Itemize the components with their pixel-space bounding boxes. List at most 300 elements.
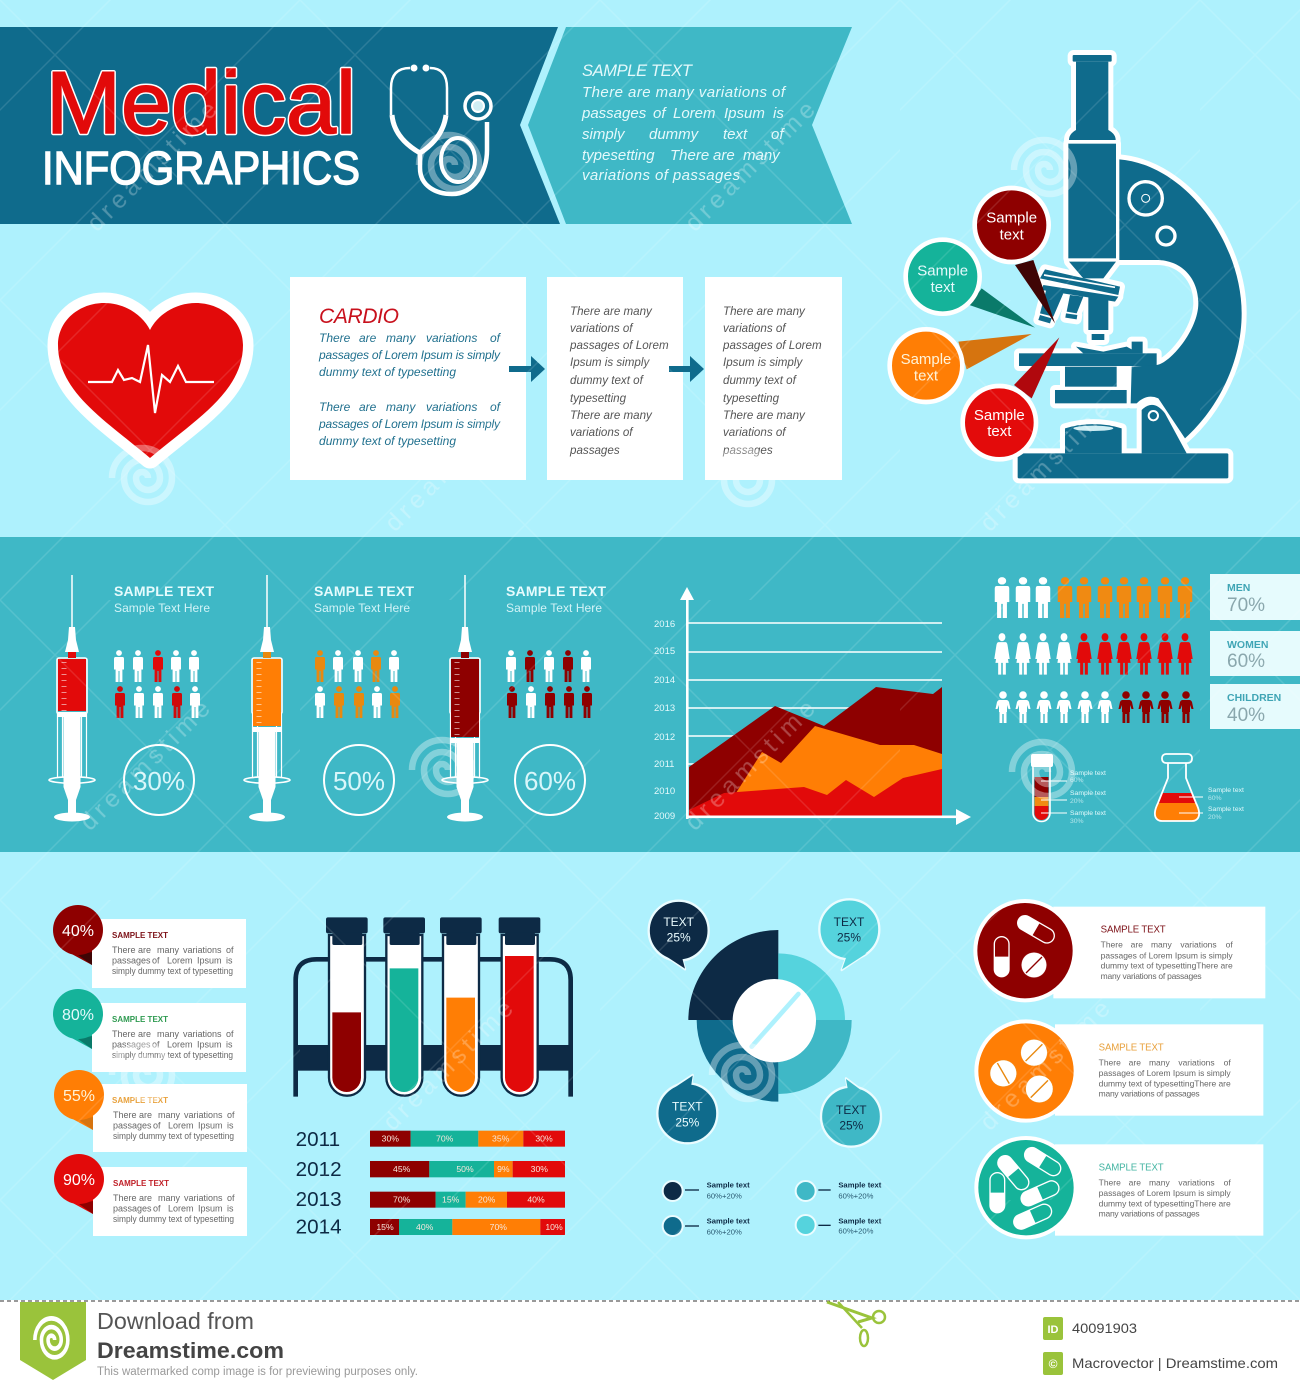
callout: dark red sample text: Sample: [986, 210, 1037, 227]
list item: 55%: [54, 1070, 247, 1152]
text block: cardio body: [318, 331, 502, 448]
list item: 90%: Ipsum: [198, 1204, 223, 1214]
list item: 90%: variations: [184, 1193, 223, 1203]
area chart: [654, 587, 971, 825]
list item: 40%: passages: [112, 956, 151, 966]
list item: 40%: are: [138, 945, 151, 955]
callout: teal sample text: [906, 240, 1035, 328]
heading and text: [1099, 1042, 1231, 1099]
chart year labels: 2015: [654, 646, 675, 657]
callout: navy 25%: TEXT: [663, 915, 695, 929]
icon: dark red syringe: [442, 575, 488, 822]
text block: cardio body: There: [319, 331, 351, 345]
panel: second text box: variations of: [570, 426, 634, 439]
icon: heart with ECG: [58, 303, 243, 458]
chart area: dark red series: [689, 687, 942, 816]
chart area: orange series: [736, 726, 942, 816]
arrow: second to third box: [669, 356, 704, 382]
legend: navy: 60%+20%: [707, 1191, 742, 1200]
panel: second text box: dummy text of: [570, 374, 645, 387]
panel: third text box: passages of Lorem: [722, 339, 822, 352]
list item: 40%: There: [112, 945, 136, 955]
bar row: 2013: 2013: [296, 1188, 342, 1211]
callout: teal sample text: Sample: [917, 263, 968, 280]
heading and text: There: [1099, 1178, 1121, 1188]
banner text block: [581, 62, 787, 184]
list item: 55%: passages: [113, 1120, 152, 1130]
list item: 80%: variations: [183, 1029, 222, 1039]
title: Infographics: INFOGRAPHICS: [42, 142, 360, 194]
list item: 40%: SAMPLE TEXT: [112, 931, 168, 940]
heading: sample text: Sample Text Here: [114, 601, 210, 615]
icon: orange pill circle: [976, 1021, 1076, 1121]
heading and text: dummy text of typesettingThere are: [1101, 961, 1233, 971]
footer strip: [0, 1300, 1300, 1390]
list item: 55%: Lorem: [168, 1120, 194, 1130]
text block: cardio body: of: [490, 400, 502, 414]
list item: 55%: SAMPLE TEXT: [112, 1096, 168, 1105]
callout: dark red sample text: [975, 188, 1055, 323]
list item: 90%: are: [139, 1193, 152, 1203]
icon: test tube with labels: Sample text: [1070, 810, 1106, 817]
icon: dark red pill circle: [975, 901, 1075, 1000]
panel: third text box: variations of: [723, 426, 787, 439]
legend: teal: 60%+20%: [838, 1191, 874, 1200]
text block: cardio body: There: [319, 400, 351, 414]
callout: teal sample text: text: [931, 279, 956, 296]
legend: dark teal: Sample text: [707, 1217, 750, 1226]
list item: 40%: Lorem: [167, 956, 193, 966]
heading: cardio: CARDIO: [319, 305, 399, 328]
banner text block: simply: [582, 126, 626, 143]
panel: second text box: variations of: [570, 322, 634, 335]
people pictogram: [315, 650, 400, 718]
percent circle: 30%: [124, 745, 194, 815]
heading and text: many variations of passages: [1099, 1089, 1200, 1099]
icon: flask with labels: Sample text: [1208, 806, 1244, 813]
list item: 55%: Ipsum: [198, 1120, 223, 1130]
banner text block: SAMPLE TEXT: [582, 62, 694, 80]
bar row: 2014: 10%: [545, 1222, 563, 1232]
icon: flask with labels: 60%: [1208, 795, 1222, 802]
men pictogram row: [995, 577, 1192, 618]
callout: red sample text: text: [987, 423, 1012, 440]
callout: teal 25%: 25%: [839, 1118, 864, 1132]
banner text block: dummy: [649, 126, 700, 143]
text block: cardio body: variations: [426, 400, 477, 414]
text block: cardio body: of: [490, 331, 502, 345]
banner text block: There are many variations of: [582, 84, 787, 101]
icon: scissors: [827, 1302, 885, 1346]
list item: 40%: simply dummy text of typesetting: [112, 966, 233, 976]
panel: third text box: [705, 277, 842, 480]
women pictogram row: [994, 633, 1193, 675]
callout: light teal 25%: [819, 899, 879, 970]
percent circle: 50%: 50%: [333, 766, 385, 796]
list item: 80%: Lorem: [167, 1040, 193, 1050]
title: Medical: Medical: [46, 53, 356, 152]
panel: third text box: typesetting: [723, 392, 780, 405]
text block: cardio body: many: [386, 331, 416, 345]
icon: flask with labels: Sample text: [1208, 787, 1244, 794]
heading and text: many: [1149, 1057, 1171, 1067]
legend box: men: 70%: [1227, 595, 1265, 616]
heading and text: many: [1151, 940, 1173, 950]
list item: 90%: There: [113, 1193, 137, 1203]
callout: light teal 25%: 25%: [837, 931, 861, 945]
chart year labels: 2016: [654, 619, 675, 630]
children pictogram row: [996, 691, 1194, 723]
footer credit badge: [1043, 1352, 1278, 1375]
legend: light teal: Sample text: [838, 1216, 882, 1225]
watermark overlay: dreamstime: [679, 695, 821, 836]
percent circle: 60%: [515, 745, 585, 815]
bar row: 2014: 2014: [296, 1215, 342, 1238]
percent circle: 50%: [324, 745, 394, 815]
heading and text: SAMPLE TEXT: [1101, 925, 1166, 936]
bar row: 2011: [296, 1128, 565, 1151]
icon: test tube with labels: 20%: [1070, 798, 1084, 805]
list item: 90%: of: [227, 1193, 235, 1203]
legend: light teal: [796, 1215, 882, 1236]
list item: 55%: variations: [184, 1110, 223, 1120]
list item: 40%: Ipsum: [197, 956, 222, 966]
banner text block: of: [653, 105, 667, 122]
text block: cardio body: many: [386, 400, 416, 414]
footer text: download: Dreamstime.com: [97, 1338, 284, 1363]
heading and text: many variations of passages: [1101, 971, 1202, 981]
panel: second text box: passages: [569, 444, 620, 457]
callout: red sample text: [963, 337, 1059, 459]
icon: flask with labels: 20%: [1208, 814, 1222, 821]
panel: third text box: variations of: [723, 322, 787, 335]
footer id badge: [1043, 1317, 1137, 1340]
legend box: men: MEN: [1227, 582, 1250, 594]
heading: sample text: [114, 583, 214, 615]
legend: navy: [663, 1181, 750, 1201]
banner text block: many: [743, 147, 781, 164]
banner text block: typesetting: [582, 147, 655, 164]
list item: 40%: [53, 905, 246, 988]
heading: sample text: SAMPLE TEXT: [314, 583, 414, 599]
bar row: 2012: 50%: [456, 1164, 474, 1174]
heading and text: passages of Lorem Ipsum is simply: [1099, 1068, 1231, 1078]
legend: dark teal: 60%+20%: [707, 1227, 742, 1236]
icon: orange syringe: [244, 575, 290, 822]
callout: navy 25%: [649, 901, 709, 969]
icon: teal tube: [383, 917, 425, 1096]
banner: dark title ribbon: [0, 27, 560, 224]
legend: light teal: 60%+20%: [838, 1227, 874, 1236]
bar row: 2011: 2011: [296, 1128, 340, 1151]
text block: cardio body: variations: [426, 331, 477, 345]
callout: red sample text: Sample: [974, 407, 1025, 424]
banner text block: of: [771, 126, 785, 143]
icon: test tube with labels: 60%: [1070, 777, 1084, 784]
title: Medical: Medical: [46, 53, 356, 152]
panel: second text box: There are many: [570, 305, 653, 318]
list item: 80%: [53, 989, 246, 1072]
test tubes and yearly bars: [296, 917, 571, 1238]
chart year labels: 2010: [654, 786, 675, 797]
bar row: 2014: 15%: [376, 1222, 394, 1232]
legend: dark teal: [663, 1216, 750, 1236]
legend box: women: 60%: [1227, 651, 1265, 672]
icon: test tube with labels: Sample text: [1070, 770, 1106, 777]
icon: microscope: [1018, 55, 1242, 478]
list item: 80%: simply dummy text of typesetting: [112, 1050, 233, 1060]
icon: central tablet: [733, 979, 816, 1062]
panel: third text box: dummy text of: [723, 374, 798, 387]
footer text: download: This watermarked comp image is for previewing purposes only.: [97, 1366, 418, 1378]
bar row: 2013: 20%: [478, 1195, 496, 1205]
list item: 40%: 40%: [62, 923, 94, 940]
bar row: 2011: 70%: [436, 1134, 454, 1144]
panel: second text box: There are many: [570, 409, 653, 422]
syringe group 3: 60%: [442, 575, 606, 822]
callout: navy 25%: 25%: [667, 931, 691, 945]
callout: dark teal 25%: TEXT: [672, 1100, 703, 1114]
header banner: [0, 27, 852, 224]
percent circle: 30%: 30%: [133, 766, 185, 796]
legend box: men: [1210, 574, 1300, 620]
bar row: 2012: 2012: [296, 1158, 342, 1181]
heading and text: [1099, 1163, 1231, 1219]
heading and text: of: [1224, 1178, 1231, 1188]
icon: teal pill circle: [976, 1138, 1076, 1237]
panel: cardio text: [290, 277, 526, 480]
text block: cardio body: dummy text of typesetting: [319, 365, 456, 379]
legend: navy: Sample text: [707, 1181, 750, 1190]
list item: 90%: [54, 1154, 247, 1236]
list item: 55%: many: [158, 1110, 181, 1120]
banner text block: Lorem: [673, 105, 716, 122]
list item: 80%: SAMPLE TEXT: [112, 1015, 168, 1024]
icon: test tube with labels: Sample text: [1070, 790, 1106, 797]
list item: 90%: is: [227, 1204, 234, 1214]
bar row: 2012: 45%: [393, 1164, 411, 1174]
chart year labels: [654, 619, 675, 822]
syringe group 2: 50%: [244, 575, 414, 822]
heading and text: variations: [1180, 940, 1217, 950]
callout: dark red sample text: text: [1000, 226, 1025, 243]
heading and text: are: [1129, 1057, 1141, 1067]
chart year labels: 2011: [654, 759, 674, 770]
list item: 55%: are: [139, 1110, 152, 1120]
bar row: 2013: 40%: [527, 1195, 545, 1205]
bar row: 2012: [296, 1158, 565, 1181]
banner text block: variations of passages: [582, 167, 740, 184]
heading: sample text: SAMPLE TEXT: [114, 583, 214, 599]
callout: orange sample text: text: [914, 368, 939, 385]
people pictogram: [506, 650, 592, 718]
watermark overlay: dreamstime: [974, 995, 1116, 1136]
list item: 55%: is: [227, 1120, 234, 1130]
panel: tablets: [976, 1021, 1263, 1121]
heading and text: of: [1224, 1057, 1231, 1067]
list item: 90%: 90%: [63, 1172, 95, 1189]
icon: red syringe: [49, 575, 95, 822]
legend box: women: [1210, 631, 1300, 676]
list item: 80%: Ipsum: [197, 1040, 222, 1050]
legend box: women: WOMEN: [1227, 639, 1268, 651]
pill panels: [975, 901, 1265, 1237]
panel: second text box: [547, 277, 683, 480]
list item: 55%: There: [113, 1110, 137, 1120]
text block: cardio body: passages of Lorem Ipsum is simply: [318, 348, 501, 362]
panel: second text box: typesetting: [570, 392, 627, 405]
heading and text: dummy text of typesettingThere are: [1099, 1199, 1231, 1209]
list item: 40%: many: [157, 945, 180, 955]
heading and text: There: [1101, 940, 1123, 950]
list item: 90%: SAMPLE TEXT: [113, 1179, 169, 1188]
callout: dark teal 25%: 25%: [675, 1116, 700, 1130]
panel: third text box: There are many: [723, 409, 806, 422]
text block: cardio body: are: [359, 400, 377, 414]
heading and text: variations: [1178, 1178, 1215, 1188]
list item: 40%: of: [152, 956, 160, 966]
banner text block: text: [723, 126, 748, 143]
footer credit badge: Macrovector | Dreamstime.com: [1072, 1355, 1278, 1371]
chart area: red series: [689, 769, 942, 816]
icon: dark red tube: [326, 917, 368, 1096]
panel: third text box: There are many: [723, 305, 806, 318]
heading and text: are: [1129, 1178, 1141, 1188]
watermark overlay: dreamstime: [81, 96, 223, 237]
bar row: 2011: 30%: [382, 1134, 399, 1144]
heading and text: many: [1149, 1178, 1171, 1188]
bar row: 2012: 30%: [531, 1164, 548, 1174]
list item: 80%: many: [157, 1029, 180, 1039]
panel: capsules and tablet: [975, 901, 1265, 1000]
list item: 40%: variations: [183, 945, 222, 955]
icon: orange tube: [440, 917, 482, 1096]
icon: flask with labels: [1155, 754, 1244, 821]
banner text block: passages: [581, 105, 647, 122]
callout: light teal 25%: TEXT: [834, 915, 865, 929]
heading: sample text: SAMPLE TEXT: [506, 583, 606, 599]
people pictogram: [114, 650, 200, 718]
chart year labels: 2013: [654, 703, 675, 714]
footer text: download: [97, 1308, 418, 1378]
heading and text: dummy text of typesettingThere are: [1099, 1078, 1231, 1088]
banner: teal sample text ribbon: [528, 27, 852, 224]
watermark overlay: dreamstime: [377, 995, 519, 1136]
list item: 90%: passages: [113, 1204, 152, 1214]
chart year labels: 2014: [654, 675, 675, 686]
icon: test tube with labels: [1031, 754, 1106, 825]
list item: 90%: many: [158, 1193, 181, 1203]
callout: dark teal 25%: [657, 1075, 717, 1143]
heading and text: There: [1099, 1057, 1121, 1067]
heading and text: many variations of passages: [1099, 1209, 1200, 1219]
bar row: 2014: 40%: [416, 1222, 434, 1232]
heading and text: variations: [1178, 1057, 1215, 1067]
list item: 80%: 80%: [62, 1007, 94, 1024]
syringe group 1: 30%: [49, 575, 214, 822]
list item: 90%: simply dummy text of typesetting: [113, 1214, 234, 1224]
watermark overlay: dreamstime: [679, 96, 821, 237]
icon: test tube with labels: 30%: [1070, 818, 1084, 825]
microscope with callouts: [890, 55, 1242, 478]
list item: 80%: is: [226, 1040, 233, 1050]
text block: cardio body: passages of Lorem Ipsum is simply: [318, 417, 501, 431]
callout: teal 25%: [821, 1078, 881, 1147]
chart year labels: 2009: [654, 811, 675, 822]
bar row: 2012: 9%: [497, 1164, 510, 1174]
list item: 80%: are: [138, 1029, 151, 1039]
legend: teal: [796, 1181, 882, 1201]
panel: many capsules: [976, 1138, 1263, 1237]
bar row: 2014: 70%: [490, 1222, 507, 1232]
panel: second text box: passages of Lorem: [569, 339, 669, 352]
banner text block: are: [713, 147, 735, 164]
panel: third text box: passages: [722, 444, 773, 457]
list item: 80%: of: [152, 1040, 160, 1050]
percent circle: 60%: 60%: [524, 766, 576, 796]
list item: 40%: is: [226, 956, 233, 966]
heading: sample text: Sample Text Here: [314, 601, 410, 615]
list item: 80%: passages: [112, 1040, 151, 1050]
bar row: 2013: [296, 1188, 565, 1211]
text block: cardio body: are: [359, 331, 377, 345]
icon: dreamstime ribbon: [20, 1302, 86, 1380]
legend box: children: [1210, 684, 1300, 729]
heading: sample text: [506, 583, 606, 615]
list item: 80%: of: [226, 1029, 234, 1039]
banner text block: There: [670, 147, 709, 164]
legend box: children: 40%: [1227, 705, 1265, 726]
bar row: 2013: 15%: [442, 1195, 460, 1205]
list item: 90%: Lorem: [168, 1204, 194, 1214]
bar row: 2014: [296, 1215, 565, 1238]
list item: 80%: There: [112, 1029, 136, 1039]
heading: sample text: [314, 583, 414, 615]
icon: stethoscope: [391, 64, 491, 194]
bar row: 2011: 35%: [492, 1134, 510, 1144]
chart axes: [680, 587, 971, 825]
chart year labels: 2012: [654, 732, 675, 743]
banner text block: Ipsum: [724, 105, 765, 122]
footer text: download: Download from: [97, 1308, 254, 1334]
bar row: 2011: 30%: [535, 1134, 553, 1144]
text block: cardio body: dummy text of typesetting: [319, 434, 456, 448]
banner text block: is: [773, 105, 784, 122]
list item: 40%: of: [226, 945, 234, 955]
legend: teal: Sample text: [838, 1181, 882, 1190]
radial pie chart with callouts: [649, 899, 882, 1236]
callout: orange sample text: Sample: [901, 351, 951, 368]
legend box: children: CHILDREN: [1227, 692, 1281, 704]
heading and text: passages of Lorem Ipsum is simply: [1099, 1188, 1231, 1198]
list item: 55%: of: [153, 1120, 161, 1130]
list item: 55%: of: [227, 1110, 235, 1120]
list item: 55%: 55%: [63, 1088, 95, 1105]
heading and text: SAMPLE TEXT: [1099, 1163, 1164, 1174]
footer credit badge: ©: [1049, 1357, 1058, 1371]
callout: teal 25%: TEXT: [836, 1103, 867, 1117]
watermark overlay: dreamstime: [74, 695, 216, 836]
pie quadrants: [688, 930, 852, 1102]
heading and text: SAMPLE TEXT: [1099, 1042, 1164, 1053]
icon: red tube: [499, 917, 540, 1096]
panel: third text box: Ipsum is simply: [723, 356, 803, 369]
heading and text: passages of Lorem Ipsum is simply: [1101, 950, 1233, 960]
callout: orange sample text: [890, 329, 1032, 402]
list item: 55%: simply dummy text of typesetting: [113, 1131, 234, 1141]
bar row: 2013: 70%: [393, 1195, 411, 1205]
panel: teal statistics band: [0, 537, 1300, 852]
